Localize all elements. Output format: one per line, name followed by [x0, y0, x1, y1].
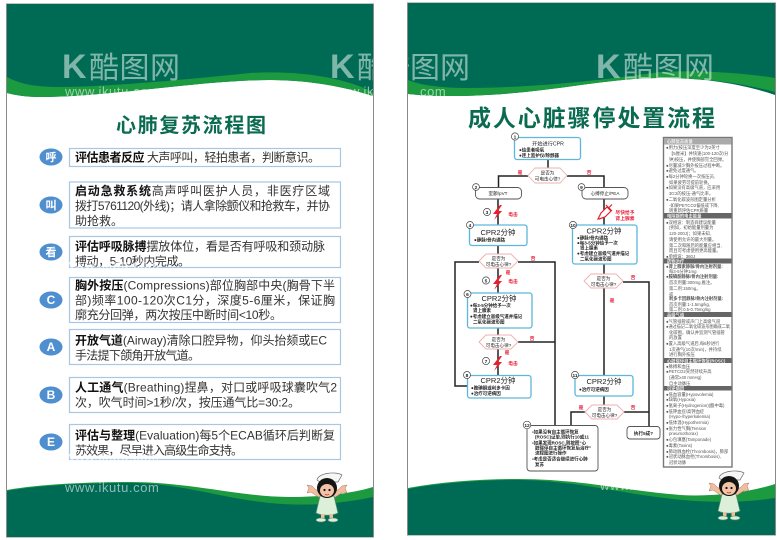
note: CPR quality: 30:2的按压-通气比率。	[669, 190, 713, 197]
decision 1: 是	[518, 169, 523, 176]
icon: syringe epinephrine: 肾上腺素	[615, 215, 635, 222]
watermark: left panel: K	[62, 48, 87, 86]
note: ROSC: (通常≥40 mmHg)	[669, 374, 702, 381]
decision 1: 是否为	[541, 170, 555, 176]
flowchart connectors	[455, 159, 649, 427]
note: defibrillation: ●双相波：制造商建议能量	[666, 219, 717, 226]
decision 4: 是	[610, 297, 615, 304]
flow box 2: VF/pVT	[473, 184, 522, 199]
note: CPR quality	[664, 138, 732, 214]
flow box 8: CPR2分钟	[480, 375, 516, 385]
flow box 11: 11	[572, 373, 578, 379]
note: CPR quality: 心肺复苏质量	[667, 138, 693, 145]
flow box 6: 6	[466, 292, 469, 298]
note: reversible causes: 冠状动脉	[669, 459, 687, 466]
note: drug therapy	[664, 258, 732, 313]
step: C compressions: C	[47, 293, 56, 307]
note: reversible causes: ●低体温(Hypothermia)	[666, 419, 709, 426]
flow box 8: ●治疗可逆病因	[471, 390, 501, 397]
icon: shock 3: 3	[486, 210, 489, 216]
note: CPR quality: ●二氧化碳波形图定量分析	[666, 196, 717, 203]
note: ROSC	[664, 358, 732, 387]
flow box 8	[464, 372, 531, 398]
icon: syringe epinephrine	[598, 204, 635, 222]
flow box 10: ●考虑建立高级气道并描记	[577, 250, 630, 257]
watermark: left panel: www.ikutu.com	[64, 257, 160, 272]
watermark: left panel: 酷图网	[89, 52, 180, 85]
flow box 1: start CPR: 开始进行CPR	[532, 140, 564, 148]
decision 1: 否	[587, 170, 592, 176]
step: A airway: 开放气道(Airway)清除口腔异物，仰头抬颏或EC	[75, 332, 327, 348]
note: defibrillation	[664, 212, 732, 260]
flow box 6: 二氧化碳波形图	[473, 318, 505, 326]
step: C compressions: 部)频率100-120次C1分，深度5-6厘米，保证胸	[75, 292, 335, 308]
flow box 1: start CPR: ●给患者吸氧	[519, 146, 545, 154]
note: CPR quality: ●尽量减少胸外按压过程中断。	[666, 162, 724, 169]
step: 看: 搏动，5-10秒内完成。	[75, 254, 190, 268]
icon: shock 3: 电击	[508, 211, 518, 218]
flow box 6	[464, 290, 532, 328]
decision 1	[518, 168, 592, 183]
flow box 8: 8	[466, 373, 469, 379]
flow box 10: CPR2分钟	[586, 226, 622, 236]
step: 叫: 拨打5761120(外线)；请人拿除颤仪和抢救车，并协	[75, 198, 330, 213]
footer green banner	[408, 479, 775, 535]
step: A airway: A	[47, 340, 56, 354]
flow box 10: 二氧化碳波形图	[580, 256, 612, 262]
note: reversible causes: ●张力性气胸(Tension	[666, 425, 707, 432]
note: CPR quality: -如果PETCO2偏低或下降,	[669, 202, 719, 209]
note: CPR quality: ●如果没有高级气道，应采用	[666, 184, 720, 191]
flow box 12: 流程图进行操作	[535, 450, 567, 456]
flow box 1: start CPR: ●连上监护仪/除颤器	[519, 152, 559, 159]
decision 4	[584, 274, 636, 304]
flow box 4: 4	[469, 223, 472, 229]
flow box 2: VF/pVT: 2	[475, 185, 478, 191]
flow box 1: start CPR	[511, 133, 580, 160]
icon: shock 5: 5	[485, 278, 488, 284]
watermark: right panel: 酷图网	[623, 52, 714, 85]
note: advanced airway: 进行胸外按压	[669, 351, 695, 358]
step: B breathing: 人工通气(Breathing)捏鼻，对口或呼吸球囊吹气2	[75, 380, 337, 394]
note: drug therapy: 首次剂量:1-1.5mg/kg,	[669, 301, 710, 308]
decision 2: 是	[506, 269, 511, 276]
note: CPR quality: 【5厘米】并快速(100-120次/分	[669, 150, 729, 157]
note: CPR quality: ●用力(按压深度至少为2英寸	[666, 144, 720, 151]
footer green banner	[7, 482, 373, 537]
decision 2: 否	[531, 256, 536, 262]
flow box 10: ●静脉/骨内通路	[577, 234, 608, 242]
note: reversible causes: (Hypo-/hyperkalemia)	[669, 414, 711, 419]
step: 叫: 助抢救。	[75, 213, 123, 228]
note: reversible causes: 可逆病因	[667, 385, 684, 392]
flow box 4: CPR2分钟	[480, 227, 516, 237]
step: B breathing	[40, 378, 340, 412]
title: 心肺复苏流程图	[116, 114, 266, 137]
flow box 10: ●每3-5分钟给予一次	[577, 240, 618, 246]
note: drug therapy: 第二剂:150mg。	[669, 285, 701, 292]
step: C compressions	[40, 278, 340, 322]
decision 3: 是否为	[492, 336, 506, 343]
note: CPR quality: 钟)按压，并使胸部完全回弹。	[669, 156, 726, 163]
flow box 8: ●胺碘酮或利多卡因	[471, 384, 510, 392]
step: A airway: 手法提下颌角开放气道。	[75, 348, 200, 362]
step: E evaluation	[40, 424, 340, 460]
note: reversible causes: pneumothorax)	[669, 431, 698, 436]
note: reversible causes: ●低钾血症/高钾血症	[666, 408, 705, 415]
flow box 12: (ROSC)证单,则执行10或11	[535, 434, 590, 440]
icon: shock 7	[482, 356, 518, 371]
flow box: done?: 执行5成?	[634, 430, 653, 437]
flow box 11: CPR2分钟	[586, 376, 622, 386]
flow box 12	[523, 421, 598, 471]
icon: shock 7: 电击	[508, 360, 518, 367]
note: ROSC: 自主动脉压	[669, 380, 691, 387]
note: ROSC: 心脏骤停自主循环恢复(ROSC)	[667, 358, 726, 364]
note: defibrillation: 第二次和随后的能量应相当,	[669, 242, 722, 249]
decision 5: 可电击心律?	[592, 412, 618, 419]
step: 看: 评估呼吸脉搏摆放体位，看是否有呼吸和颈动脉	[75, 238, 325, 254]
step: E evaluation: 评估与整理(Evaluation)每5个ECAB循环后判断复	[75, 428, 335, 442]
decision 4: 可电击心律?	[591, 281, 617, 288]
flow box 12: ▪如果没有自主循环恢复	[532, 428, 579, 436]
flow box 6: CPR2分钟	[481, 293, 517, 303]
note: defibrillation: 请使用允许的最大剂量。	[669, 236, 716, 243]
note: advanced airway: 高级气道	[667, 312, 685, 318]
flow box 12: ▪如果发现ROSC,则按照“心	[532, 440, 587, 446]
decision 5: 是否为	[598, 406, 612, 413]
note: CPR quality: ●避免过度通气。	[666, 167, 699, 174]
note: drug therapy: 利多卡因静脉/骨内注射剂量:	[669, 295, 724, 302]
note: CPR quality: 则重新评估CPR质量	[669, 207, 709, 214]
decision 2	[479, 254, 536, 276]
note: defibrillation: 电除颤的电击能量	[667, 212, 702, 220]
step: 呼: 呼	[46, 151, 56, 164]
step: 叫: 叫	[46, 199, 56, 212]
step: E evaluation: E	[47, 435, 55, 449]
flow box 11	[571, 371, 633, 396]
flow box 10: 肾上腺素	[580, 244, 598, 252]
note: reversible causes	[664, 385, 732, 466]
note: advanced airway: 的放置	[669, 334, 683, 341]
note: reversible causes: ●冠状动脉血栓(Thrombosis),	[666, 453, 721, 460]
watermark: right panel: K	[596, 48, 621, 86]
note: drug therapy: 每3-5分钟1mg	[669, 268, 697, 275]
flow box 9: asystole/PEA: 心搏停止/PEA	[591, 190, 620, 197]
note: reversible causes: ●低血容量(Hypovolemia)	[666, 391, 714, 398]
sidebar: CPR reference notes	[664, 138, 732, 467]
decision 3: 可电击心律?	[486, 342, 512, 349]
step: 看	[40, 236, 340, 268]
step: 叫	[40, 182, 340, 228]
header green banner	[408, 3, 775, 96]
flow box 12: 脏骤停自主循环恢复后治疗”	[535, 444, 591, 452]
note: drug therapy: 药物治疗	[667, 258, 685, 265]
decision 4: 是否为	[597, 275, 611, 282]
flow box 12: 复苏	[535, 461, 544, 468]
icon: nurse mascot	[307, 473, 347, 522]
flow box 11: ●治疗可逆病因	[579, 386, 609, 393]
note: drug therapy: 第二剂:0.5-0.75mg/kg	[669, 306, 711, 313]
step: C compressions: 廓充分回弹，两次按压中断时间<10秒。	[75, 307, 282, 322]
flow box 2: VF/pVT: 室颤/pVT	[489, 190, 508, 197]
watermark: right panel: 酷图网	[380, 52, 470, 85]
decision 3: 是	[505, 349, 510, 356]
note: advanced airway: ●气管插管或声门上高级气道	[666, 318, 721, 325]
watermark: right panel: www.ikutu.com	[599, 478, 694, 493]
flow box 9: asystole/PEA	[578, 184, 628, 199]
flow box 10: 10	[570, 223, 576, 229]
note: advanced airway: 化碳图，确认并监测气管插管	[669, 329, 726, 336]
decision 3: 否	[530, 336, 535, 342]
watermark: left panel: www.ikutu.com	[64, 449, 160, 464]
step: 叫: 启动急救系统高声呼叫医护人员，非医疗区域	[75, 183, 330, 198]
watermark: left panel: www.ikutu.com	[64, 480, 160, 495]
decision 5	[579, 404, 636, 419]
flow box 6: ●考虑建立高级气道并描记	[470, 313, 523, 320]
panel: adult cardiac arrest poster	[380, 3, 776, 535]
step: 呼	[40, 148, 340, 166]
watermark: left panel: www.ikutu.com	[64, 84, 160, 99]
note: defibrillation: 120-200J)；如果未知,	[669, 230, 711, 237]
icon: nurse mascot	[709, 471, 749, 520]
note: drug therapy: ●肾上腺素静脉/骨内注射剂量:	[666, 263, 723, 270]
note: reversible causes: ●毒素(Toxins)	[666, 442, 693, 449]
flow box 4	[466, 222, 527, 246]
decision 4: 否	[631, 275, 636, 281]
flow box 6: ●每3-5分钟给予一次	[470, 302, 511, 309]
flow box: done?	[627, 426, 660, 439]
flow box 12: 12	[524, 423, 530, 429]
note: reversible causes: ●氢离子(Hydrogenion)(酸中毒)	[666, 402, 725, 409]
watermark: right panel: com	[420, 84, 446, 99]
note: reversible causes: ●缺氧(Hypoxia)	[666, 396, 696, 403]
icon: shock 3	[483, 205, 518, 220]
note: drug therapy: 或	[669, 291, 674, 297]
step: 呼: 评估患者反应 大声呼叫，轻拍患者，判断意识。	[75, 150, 320, 164]
flow box 4: ●静脉/骨内通路	[474, 236, 505, 244]
step: C compressions: 胸外按压(Compressions)部位胸部中央(胸骨下半	[75, 278, 335, 292]
note: advanced airway: ●通过描记二氧化碳波形图确或二氧	[666, 323, 731, 330]
watermark: left panel: www.ikutu.com	[329, 84, 424, 99]
decision 5: 是	[579, 404, 584, 411]
note: advanced airway: ●置入高级气道后,每6秒进行	[666, 340, 720, 347]
decision 1: 可电击心律?	[535, 176, 561, 182]
title: 成人心脏骤停处置流程	[468, 105, 715, 131]
watermark: left panel	[62, 48, 447, 495]
step: E evaluation: 苏效果，尽早进入高级生命支持。	[75, 442, 243, 458]
note: drug therapy: 首次剂量:300mg,推注。	[669, 279, 715, 286]
step: B breathing: 次，吹气时间>1秒/次，按压通气比=30:2。	[75, 394, 300, 410]
decision 5: 否	[631, 405, 636, 411]
note: defibrillation: ●单相波：360J	[666, 253, 695, 260]
decision 2: 可电击心律?	[486, 261, 512, 268]
flow box 10	[569, 221, 637, 264]
note: advanced airway: 1次通气(10次/min)，并持续	[669, 346, 722, 353]
flow box 6: 肾上腺素	[473, 307, 491, 314]
step: A airway	[40, 330, 340, 364]
icon: syringe epinephrine: 尽快给予	[615, 209, 635, 216]
note: reversible causes: ●肺动脉血栓(Thrombosis)，肺部	[666, 448, 729, 455]
icon: shock 7: 7	[485, 359, 488, 365]
watermark: left panel: 酷图网	[357, 52, 447, 85]
note: defibrillation: 而且可考虑使用更高能量。	[669, 247, 721, 254]
watermark: left panel: K	[330, 48, 355, 86]
flow box 1: start CPR: 1	[514, 134, 517, 140]
note: defibrillation: (例如，初始能量剂量为	[669, 224, 713, 231]
note: drug therapy: ●胺碘酮静脉/骨内注射剂量:	[666, 273, 719, 280]
note: CPR quality: 如果疲劳可提前轮换。	[669, 179, 712, 186]
icon: shock 5: 电击	[508, 278, 518, 285]
icon: shock 5	[482, 275, 518, 290]
step: B breathing: B	[47, 388, 56, 402]
flow box 9: asystole/PEA: 9	[580, 185, 583, 191]
decision 2: 是否为	[492, 255, 506, 262]
watermark: right panel	[380, 48, 714, 493]
flow box 12: ▪考虑是否适合继续进行心肺	[532, 456, 588, 462]
note: ROSC: ●脉搏和血压	[666, 363, 691, 370]
note: ROSC: ●PETCO2突然持续升高	[666, 368, 712, 375]
decision 3	[479, 335, 535, 356]
header green banner	[7, 4, 373, 97]
note: reversible causes: ●心包填塞(Tamponade)	[666, 436, 712, 443]
note: CPR quality: ●每2分钟轮换一次按压员,	[666, 173, 715, 180]
step: 看: 看	[46, 245, 56, 259]
note: advanced airway	[664, 312, 732, 358]
panel: CPR flow poster	[6, 4, 374, 538]
